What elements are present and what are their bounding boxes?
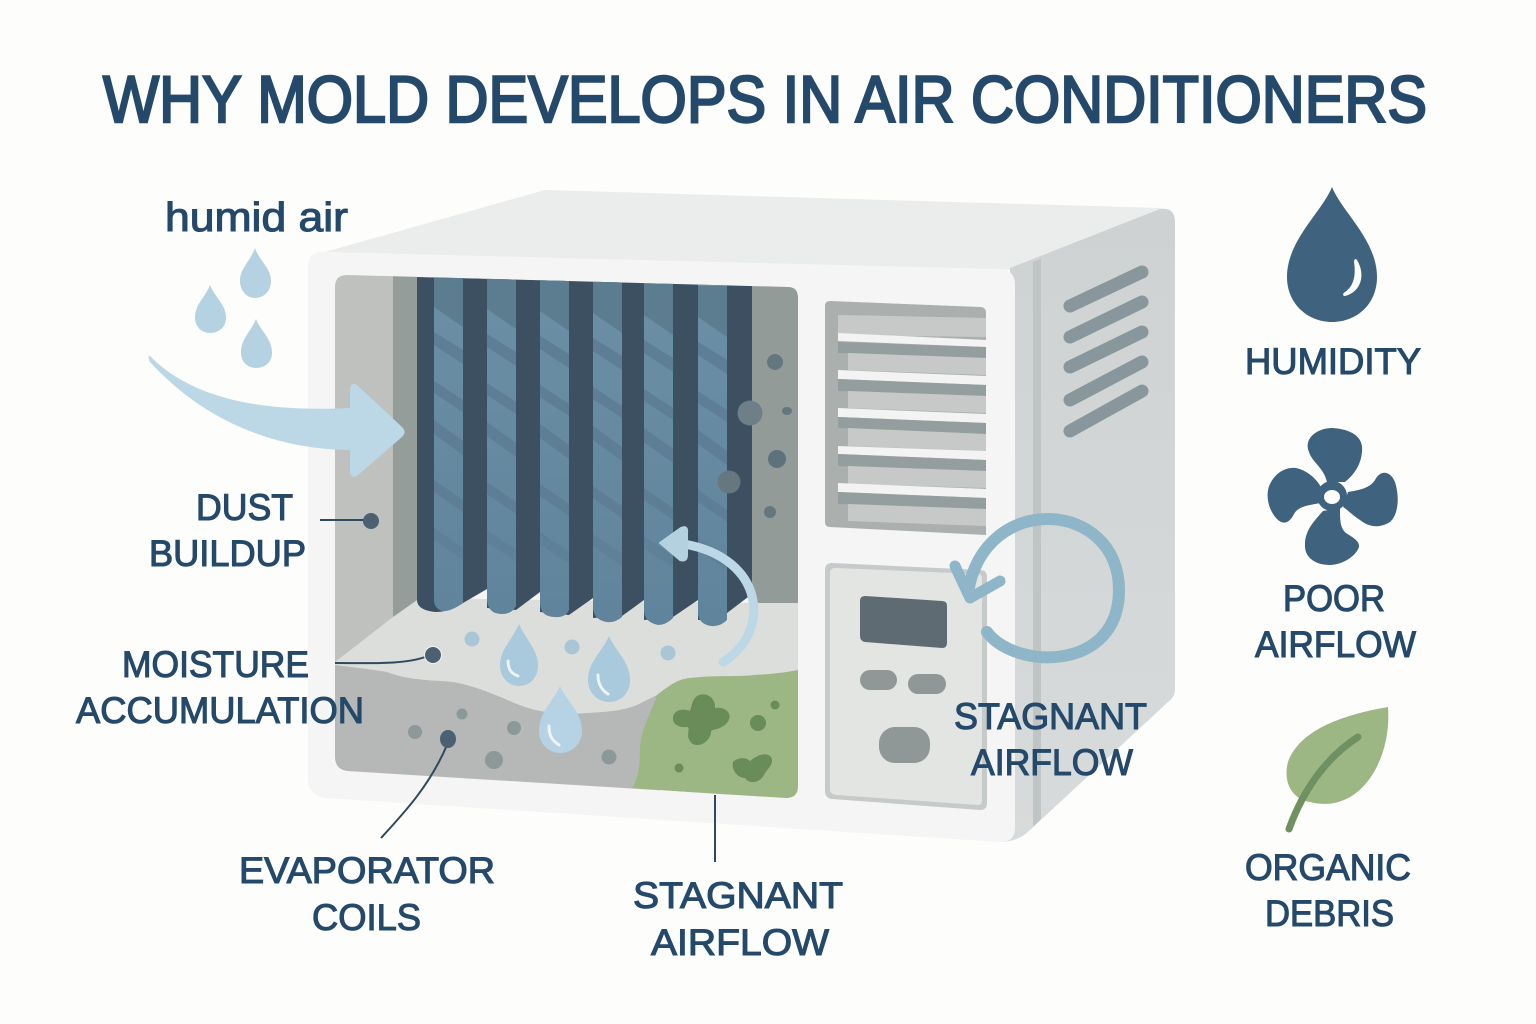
droplet 2 — [588, 636, 630, 702]
label: stagnant airflow bottom — [633, 875, 843, 963]
label: stagnant airflow bottom: AIRFLOW — [651, 922, 829, 963]
evaporator coil dark back — [417, 277, 752, 620]
label: stagnant airflow bottom: STAGNANT — [633, 875, 843, 916]
unit top face — [325, 190, 1162, 270]
leader: evaporator coils — [381, 730, 456, 838]
label: dust buildup: DUST — [196, 487, 293, 528]
label: moisture accumulation — [76, 644, 364, 731]
label: moisture accumulation: MOISTURE — [122, 644, 309, 685]
label: poor airflow: POOR — [1283, 578, 1385, 619]
left wall — [335, 270, 393, 670]
floor bubbles — [464, 632, 676, 660]
label: poor airflow — [1255, 578, 1416, 665]
label: organic debris: DEBRIS — [1265, 893, 1394, 934]
stagnant airflow circular arrow — [955, 519, 1119, 657]
side vents — [1070, 272, 1142, 431]
front face — [308, 252, 1015, 842]
label: organic debris: ORGANIC — [1245, 847, 1411, 888]
label: stagnant airflow right — [954, 696, 1147, 783]
droplet 1 — [500, 624, 538, 686]
label: poor airflow: AIRFLOW — [1255, 624, 1416, 665]
leader: moisture — [335, 646, 442, 664]
mold colonies — [673, 694, 780, 782]
fan hub — [1324, 490, 1340, 504]
label: dust buildup — [149, 487, 306, 574]
dirty gray base — [330, 665, 660, 800]
front air grille — [825, 301, 986, 535]
label: stagnant airflow right: AIRFLOW — [971, 742, 1133, 783]
label: evaporator coils: COILS — [312, 897, 421, 938]
label: humidity: HUMIDITY — [1245, 341, 1421, 382]
air conditioner unit — [308, 190, 1175, 842]
side strip — [1033, 259, 1041, 827]
small return arrow — [660, 527, 754, 662]
interior window — [330, 270, 798, 800]
label: evaporator coils: EVAPORATOR — [239, 850, 495, 891]
label: humid air: humid air — [165, 194, 348, 240]
floor: moisture area — [335, 598, 798, 714]
label: evaporator coils — [239, 850, 495, 938]
title: WHY MOLD DEVELOPS IN AIR CONDITIONERS — [103, 62, 1427, 136]
droplet 3 — [539, 686, 582, 753]
right wall — [752, 280, 798, 620]
label: dust buildup: BUILDUP — [149, 533, 306, 574]
icon: leaf — [1287, 707, 1388, 829]
right wall dust specks — [718, 354, 792, 518]
icon: fan — [1268, 428, 1398, 565]
inner left wall — [393, 270, 417, 630]
label: moisture accumulation: ACCUMULATION — [76, 690, 364, 731]
floor water droplets — [500, 624, 630, 753]
unit side face — [1000, 209, 1175, 842]
label: organic debris — [1245, 847, 1411, 934]
gray dust specks — [408, 708, 616, 769]
humid air arrow — [148, 356, 404, 477]
leader: dust — [320, 513, 379, 529]
green mold patch — [632, 670, 798, 800]
humid air droplets — [195, 248, 272, 368]
leader lines — [320, 513, 715, 862]
coil fins — [434, 276, 727, 626]
display — [860, 596, 947, 648]
leader: mold — [714, 795, 716, 862]
icon: humidity drop — [1287, 187, 1377, 322]
control panel — [825, 563, 987, 810]
buttons — [860, 670, 897, 690]
label: stagnant airflow right: STAGNANT — [954, 696, 1147, 737]
